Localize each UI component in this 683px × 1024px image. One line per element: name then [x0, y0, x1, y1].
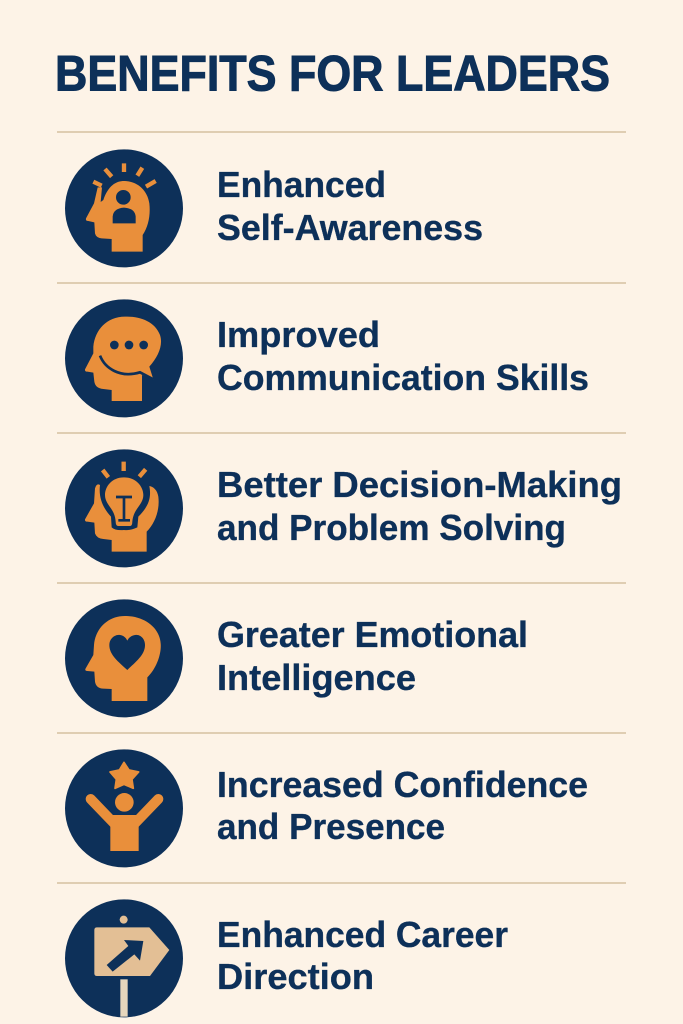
text: improved communication skills: Improved	[217, 314, 380, 355]
text: improved communication skills	[217, 314, 589, 398]
text: increased confidence: and Presence	[217, 806, 445, 847]
icon: head with person and rays	[65, 149, 183, 267]
title: BENEFITS FOR LEADERS	[55, 46, 610, 102]
text: better decision-making: and Problem Solving	[217, 507, 566, 548]
text: increased confidence: Increased Confidence	[217, 764, 588, 805]
text: greater emotional intelligence	[217, 614, 528, 698]
icon: head with light bulb	[65, 449, 183, 567]
icon: signpost with arrow	[65, 899, 183, 1017]
text: enhanced self-awareness: Enhanced	[217, 164, 386, 205]
text: enhanced career direction: Direction	[217, 956, 374, 997]
panel: improved communication skills	[65, 299, 589, 417]
panel: greater emotional intelligence	[65, 599, 528, 717]
text: enhanced career direction: Enhanced Career	[217, 914, 508, 955]
text: greater emotional intelligence: Intelligence	[217, 657, 416, 698]
text: enhanced career direction	[217, 914, 508, 997]
panel: increased confidence	[65, 749, 588, 867]
icon: head with heart	[65, 599, 183, 717]
text: increased confidence	[217, 764, 588, 847]
panel: enhanced career direction	[65, 899, 508, 1017]
text: better decision-making	[217, 464, 622, 548]
icon: head with speech bubble	[65, 299, 183, 417]
text: greater emotional intelligence: Greater Emotional	[217, 614, 528, 655]
panel: better decision-making	[65, 449, 622, 567]
text: better decision-making: Better Decision-Making	[217, 464, 622, 505]
text: improved communication skills: Communication Skills	[217, 357, 589, 398]
text: enhanced self-awareness: Self-Awareness	[217, 207, 483, 248]
icon: person with raised arms and star	[65, 749, 183, 867]
panel: enhanced self-awareness	[65, 149, 483, 267]
text: enhanced self-awareness	[217, 164, 483, 248]
